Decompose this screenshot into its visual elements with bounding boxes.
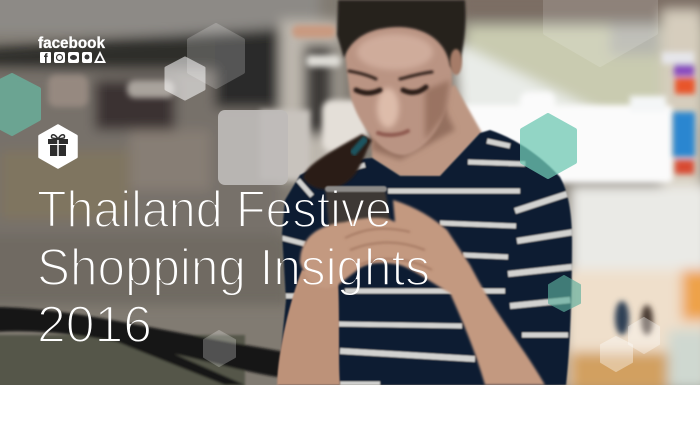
escalator handrail — [0, 307, 285, 390]
facebook logo block — [38, 35, 106, 63]
title: Shopping Insights — [37, 239, 430, 297]
face — [344, 22, 452, 155]
cheek shade — [425, 80, 450, 140]
hexagon: teal right — [522, 115, 575, 177]
neck shadow — [370, 111, 456, 162]
shirt — [278, 130, 574, 385]
hexagon: bottom right one — [601, 337, 632, 371]
white display panel — [455, 92, 673, 183]
family app icons — [40, 51, 106, 63]
icon: gift in white hexagon — [40, 126, 76, 168]
hexagon: bottom left — [204, 331, 235, 366]
hands — [300, 200, 545, 385]
hair tie — [352, 138, 366, 154]
title: 2016 — [37, 296, 152, 354]
finger shadows — [345, 229, 432, 270]
left arm — [277, 270, 340, 385]
hair — [337, 0, 466, 72]
hexagon: small teal sleeve — [549, 276, 580, 311]
ear — [450, 49, 462, 75]
coloured shelf — [662, 52, 695, 174]
blurred highlights left — [48, 25, 368, 180]
hexagon: bottom right two — [629, 318, 659, 353]
hexagon: large grey — [189, 25, 243, 87]
shirt stripes — [282, 141, 574, 384]
person — [277, 0, 574, 385]
neck — [372, 85, 482, 178]
blurred mall right — [455, 0, 700, 392]
eyes and brows — [349, 71, 432, 135]
forehead light — [357, 34, 433, 70]
title — [38, 190, 428, 342]
title: Thailand Festive — [37, 181, 392, 239]
hexagon: teal left — [0, 75, 39, 134]
hexagon: small light — [166, 58, 204, 99]
ponytail — [303, 134, 372, 189]
facebook wordmark: facebook — [38, 35, 105, 52]
hexagon: top right — [545, 0, 656, 65]
translucent rounded panel — [218, 110, 288, 185]
nose highlight — [377, 88, 399, 128]
blurred figures — [615, 301, 653, 335]
phone — [324, 190, 391, 226]
blurred mall left — [0, 0, 340, 305]
